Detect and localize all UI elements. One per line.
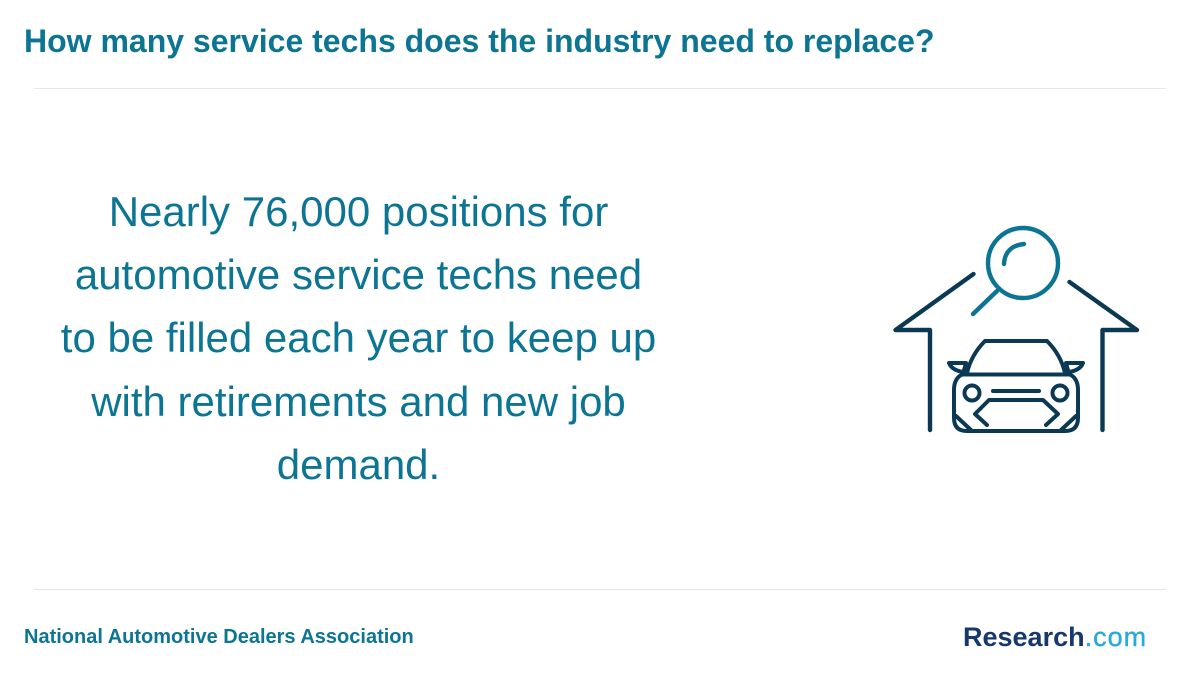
icon: car in garage with magnifying glass <box>893 226 1140 434</box>
main statement text: Nearly 76,000 positions for <box>109 188 608 235</box>
source label: National Automotive Dealers Association <box>24 626 414 648</box>
main statement text <box>61 188 656 488</box>
main statement text: with retirements and new job <box>91 378 626 425</box>
title: How many service techs does the industry need to replace? <box>24 23 935 59</box>
icon: garage outline <box>896 274 1137 430</box>
icon: car <box>949 341 1083 431</box>
main statement text: demand. <box>277 441 440 488</box>
icon: magnifying glass <box>973 228 1058 314</box>
main statement text: automotive service techs need <box>75 251 642 298</box>
main statement text: to be filled each year to keep up <box>61 314 656 361</box>
logo: Research.com: Research.com <box>963 622 1147 652</box>
